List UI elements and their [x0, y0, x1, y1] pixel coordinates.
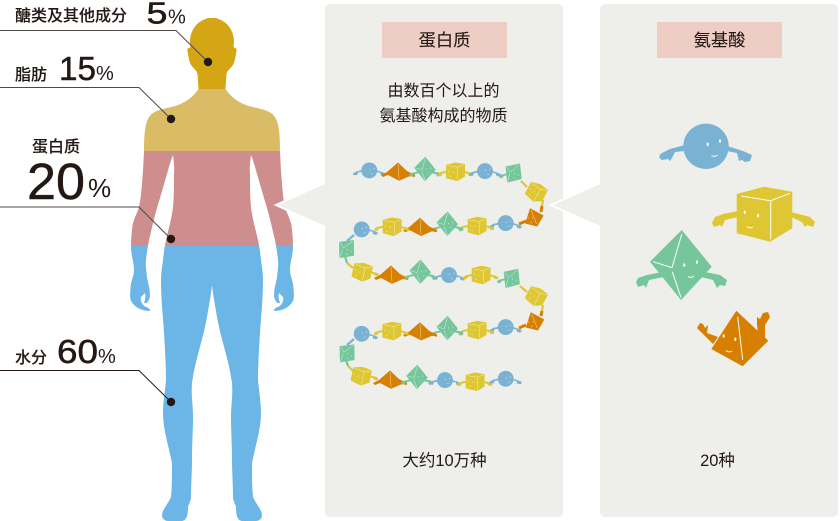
- callout: water 60%: [0, 333, 175, 406]
- human body figure: [130, 18, 294, 521]
- callout: protein 20%: 蛋白质: [32, 138, 80, 156]
- text: protein description: 由数百个以上的: [387, 82, 500, 100]
- callout: protein 20%: 20: [27, 153, 85, 210]
- callout: water 60%: 水分: [15, 349, 47, 367]
- text: about 100,000 kinds: 大约10万种: [402, 451, 487, 470]
- callout: protein 20%: %: [88, 173, 111, 203]
- callout: other components 5%: [0, 0, 212, 66]
- callout: water 60%: 60: [57, 333, 98, 370]
- callout: protein 20%: [0, 138, 175, 243]
- heading: amino acids: 氨基酸: [694, 30, 745, 50]
- callout: other components 5%: %: [168, 6, 186, 28]
- heading: protein: [382, 22, 507, 58]
- heading: amino acids: [657, 22, 782, 58]
- callout pointer: protein: [276, 183, 326, 227]
- panel: protein: [325, 4, 563, 517]
- callout: water 60%: %: [98, 346, 116, 368]
- character: yellow cube: [712, 187, 815, 242]
- callout pointer: amino acids: [551, 183, 601, 227]
- character: green octahedron: [636, 230, 727, 300]
- chain of amino acids: [331, 157, 549, 391]
- callout: fat 15%: [0, 50, 175, 123]
- callout: fat 15%: 15: [59, 50, 96, 87]
- callout: other components 5%: 醣类及其他成分: [15, 7, 127, 25]
- character: blue circle: [659, 124, 752, 169]
- character: orange pyramid: [697, 311, 770, 366]
- heading: protein: 蛋白质: [419, 30, 470, 50]
- callout: fat 15%: 脂肪: [15, 66, 47, 84]
- text: protein description: [379, 82, 508, 125]
- callout: fat 15%: %: [96, 63, 114, 85]
- text: 20 kinds: 20种: [700, 451, 735, 470]
- panel: amino acids: [551, 4, 838, 517]
- text: protein description: 氨基酸构成的物质: [379, 107, 508, 125]
